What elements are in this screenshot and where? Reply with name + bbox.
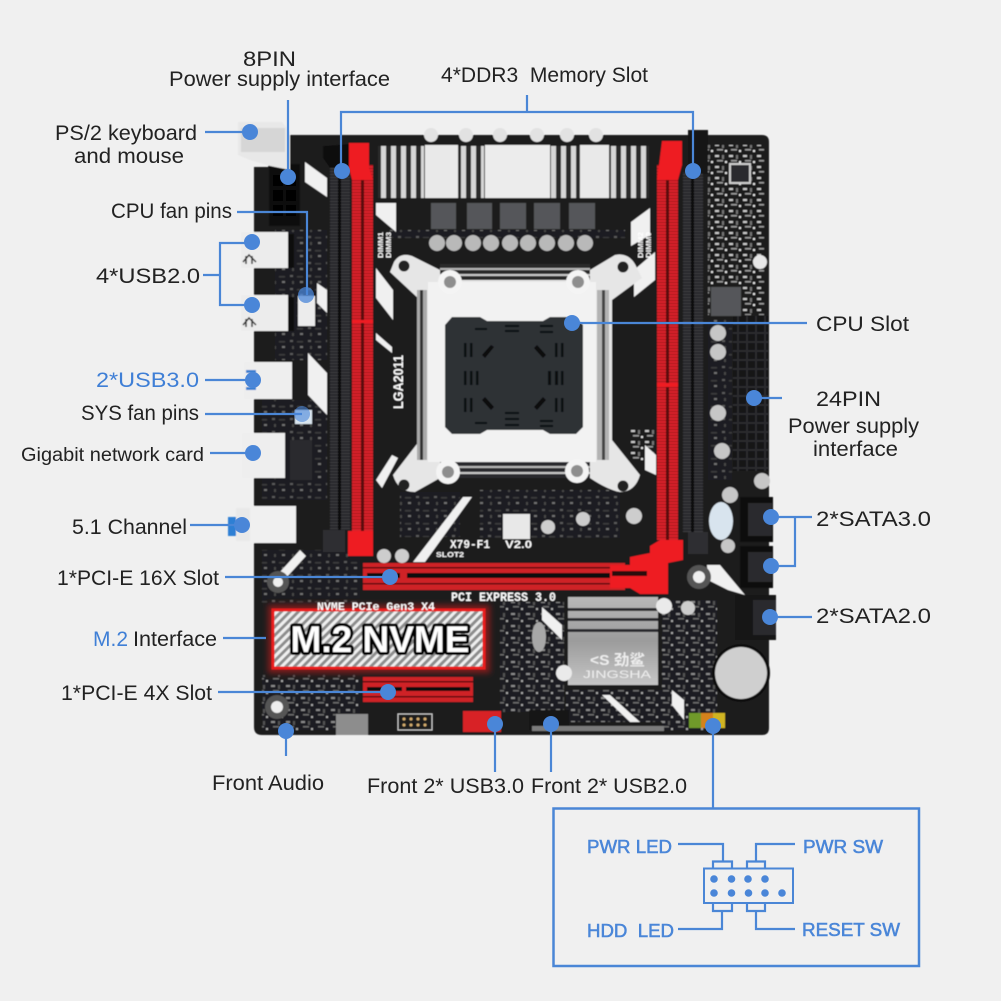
label: PWR SW: PWR SW xyxy=(803,836,884,857)
chipset heatsink: JINGSHA xyxy=(583,669,652,681)
white PCB accents xyxy=(280,162,745,722)
PCI-E 16X slot xyxy=(363,540,683,594)
USB3 front header xyxy=(463,711,501,732)
line: front USB2 xyxy=(550,724,552,772)
label: 5.1 Channel: 5.1 Channel xyxy=(72,516,187,539)
line: CPU slot xyxy=(572,322,807,324)
label: 4*USB2.0: 4*USB2.0 xyxy=(96,265,200,288)
line: PCI-E 16X xyxy=(225,576,390,578)
DIMM labels: DIMM3 xyxy=(386,232,393,258)
DIMM labels xyxy=(378,232,653,258)
pin header xyxy=(704,868,793,903)
line: front USB3 xyxy=(494,723,496,772)
chipset small IC xyxy=(730,164,750,183)
label: M.2 Interface xyxy=(93,628,217,651)
right black memory slot xyxy=(683,130,708,554)
8PIN power connector xyxy=(269,164,300,226)
crystal xyxy=(532,622,546,652)
line: USB3.0 xyxy=(205,379,253,381)
label: 8PIN power supply interface: 8PIN xyxy=(243,48,296,71)
line: 4*USB2.0 bracket xyxy=(203,243,252,305)
COM header xyxy=(398,714,432,730)
label: Gigabit network card: Gigabit network card xyxy=(21,445,204,466)
board capacitors xyxy=(377,508,695,615)
label: HDD LED: HDD LED xyxy=(587,920,674,941)
model label xyxy=(436,538,532,559)
audio chip pad xyxy=(336,714,368,735)
PCI express caption: PCI EXPRESS 3.0 xyxy=(451,590,556,605)
front panel header xyxy=(689,713,725,728)
label: 8PIN power supply interface: Power supply interface xyxy=(169,68,390,91)
line: DDR3 bracket xyxy=(341,95,693,170)
line: M.2 xyxy=(223,637,266,639)
label: 4*DDR3 memory slot: 4*DDR3 Memory Slot xyxy=(441,64,648,87)
socket frame xyxy=(390,255,642,492)
NVME caption: NVME PCIe Gen3 X4 xyxy=(317,602,435,614)
line: SYS fan xyxy=(205,413,302,415)
label: CPU fan pins: CPU fan pins xyxy=(111,200,232,223)
buzzer xyxy=(709,502,733,540)
label: SYS fan pins: SYS fan pins xyxy=(81,402,199,425)
circuitry texture xyxy=(262,145,764,730)
label: 24PIN power supply interface: 24PIN xyxy=(816,388,881,411)
DIMM labels: DIMM2 xyxy=(638,232,645,258)
CPU block xyxy=(445,317,583,434)
label: M.2 Interface: M.2 xyxy=(93,628,128,651)
line: SATA3 bracket xyxy=(771,517,812,566)
inner plate xyxy=(428,282,596,462)
PCI-E 4X slot xyxy=(363,677,473,702)
model label: X79-F1 xyxy=(450,538,490,552)
USB2 front header xyxy=(529,710,569,730)
IO choke xyxy=(711,287,741,316)
right red memory slot xyxy=(657,141,682,540)
fan headers xyxy=(295,296,315,424)
24PIN power connector xyxy=(733,316,768,471)
chipset heatsink: <S 劲鲨 xyxy=(590,651,645,669)
label: 2*SATA2.0: 2*SATA2.0 xyxy=(816,605,931,628)
DIMM labels: DIMM0 xyxy=(646,232,653,258)
left red memory slot xyxy=(348,143,373,556)
callout lines and dots xyxy=(190,95,812,808)
label: 24PIN power supply interface: Power supply xyxy=(788,415,920,438)
wiring: PWR SW xyxy=(747,844,795,869)
left black memory slot xyxy=(323,144,350,552)
PCB xyxy=(254,135,769,735)
USB 2.0 ports xyxy=(241,232,294,331)
label: Front 2* USB2.0: Front 2* USB2.0 xyxy=(531,775,687,798)
LGA2011 label: LGA2011 xyxy=(390,355,406,409)
label: 1*PCI-E 16X Slot: 1*PCI-E 16X Slot xyxy=(57,567,219,590)
inductors xyxy=(431,203,595,229)
model label: SLOT2 xyxy=(436,550,464,559)
PS/2 port xyxy=(238,122,290,170)
line: CPU fan xyxy=(237,212,307,295)
SATA connectors xyxy=(735,497,776,640)
USB 3.0 port xyxy=(244,362,292,399)
label: PWR LED: PWR LED xyxy=(587,836,672,857)
label: 2*USB3.0: 2*USB3.0 xyxy=(96,369,199,392)
line: LAN xyxy=(210,452,253,454)
label: PS/2 keyboard and mouse: PS/2 keyboard xyxy=(55,122,197,145)
line: PCI-E 4X xyxy=(218,691,388,693)
line: PS/2 xyxy=(205,131,250,133)
retention bars xyxy=(417,264,609,478)
label: PS/2 keyboard and mouse xyxy=(55,122,197,168)
label: 24PIN power supply interface xyxy=(788,388,920,461)
right side capacitors xyxy=(710,255,770,553)
audio jack xyxy=(228,506,296,543)
label: 1*PCI-E 4X Slot: 1*PCI-E 4X Slot xyxy=(61,682,212,705)
bottom edge strip xyxy=(532,726,664,731)
CPU block slots xyxy=(464,325,564,427)
label: 2*SATA3.0: 2*SATA3.0 xyxy=(816,508,931,531)
M.2 NVME card xyxy=(268,605,490,673)
callout dots xyxy=(234,124,779,739)
LAN port xyxy=(242,433,312,480)
CPU socket xyxy=(390,255,642,492)
line: 8PIN xyxy=(287,100,289,177)
line: 5.1 channel xyxy=(190,524,242,526)
line: SATA2 xyxy=(770,616,812,618)
CMOS battery xyxy=(712,644,770,702)
line: front panel xyxy=(712,726,714,808)
label: Front 2* USB3.0: Front 2* USB3.0 xyxy=(367,775,524,798)
label: 24PIN power supply interface: interface xyxy=(813,438,898,461)
label: M.2 Interface: Interface xyxy=(133,628,217,651)
VRM heatsink xyxy=(378,145,649,198)
label: CPU Slot: CPU Slot xyxy=(816,313,909,336)
screws xyxy=(398,260,628,492)
fan hub xyxy=(265,565,711,719)
chipset heatsink xyxy=(556,597,672,685)
top capacitors xyxy=(424,128,603,142)
label: PS/2 keyboard and mouse: and mouse xyxy=(74,145,184,168)
motherboard xyxy=(228,122,776,735)
label: Front Audio: Front Audio xyxy=(212,772,324,795)
wiring: PWR LED xyxy=(678,844,732,869)
VRM capacitors xyxy=(429,235,593,251)
label: RESET SW: RESET SW xyxy=(802,919,901,940)
panel: front panel pinout xyxy=(554,808,919,966)
QR code xyxy=(503,514,530,539)
M.2 NVME card: M.2 NVME xyxy=(290,619,470,660)
DIMM labels: DIMM1 xyxy=(378,232,385,258)
wiring: HDD LED xyxy=(678,903,732,929)
line: 24PIN xyxy=(754,397,782,399)
model label: V2.0 xyxy=(505,539,532,551)
line: front audio xyxy=(285,731,287,756)
label: 8PIN power supply interface xyxy=(169,48,390,91)
wiring: RESET SW xyxy=(747,903,795,929)
